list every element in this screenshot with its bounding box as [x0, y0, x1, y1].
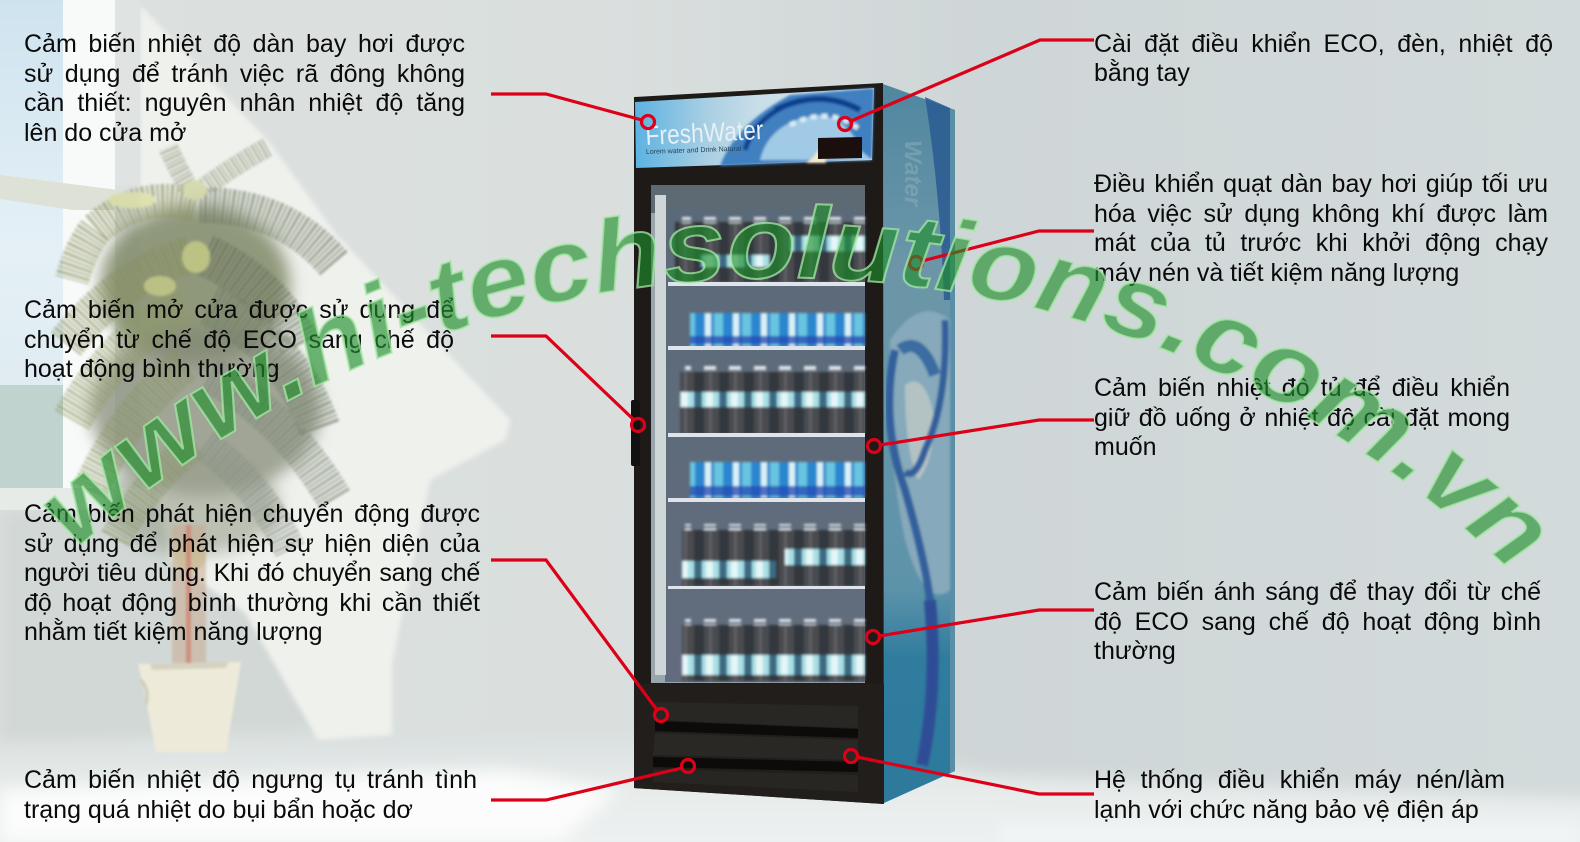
text: motion sensor: nhằm tiết kiệm năng lượng — [24, 618, 323, 646]
leader: evaporator sensor — [491, 94, 654, 128]
text: evaporator sensor: lên do cửa mở — [24, 119, 186, 147]
text: motion sensor: sử dụng để phát hiện sự hiện diện của — [24, 530, 480, 558]
leader: condenser sensor — [491, 760, 694, 800]
text: cabinet temperature sensor — [1094, 374, 1510, 461]
text: fan control — [1094, 170, 1548, 287]
text: fan control: máy nén và tiết kiệm năng lượng — [1094, 259, 1459, 287]
row 3 bottles — [680, 366, 865, 434]
text: door sensor — [24, 296, 454, 383]
text: condenser sensor: trạng quá nhiệt do bụi bẩn hoặc dơ — [24, 796, 413, 824]
text: cabinet temperature sensor: muốn — [1094, 433, 1157, 461]
row 1 bottles — [675, 217, 865, 282]
pot — [138, 662, 241, 752]
text: evaporator sensor: sử dụng để tránh việc rã đông không — [24, 60, 465, 88]
text: cabinet temperature sensor: Cảm biến nhiệt độ tủ để điều khiển — [1094, 374, 1510, 402]
header display panel — [635, 88, 874, 168]
text: door sensor: chuyển từ chế độ ECO sang chế độ — [24, 326, 454, 354]
text: light sensor: Cảm biến ánh sáng để thay đổi từ chế — [1094, 578, 1541, 606]
text: compressor protection — [1094, 766, 1505, 824]
text: light sensor — [1094, 578, 1541, 665]
text: fan control: hóa việc sử dụng không khí được làm — [1094, 200, 1548, 228]
condenser grille — [634, 684, 884, 804]
window — [0, 0, 150, 510]
side panel wave graphic — [889, 311, 950, 765]
glass door interior with shelves — [651, 185, 865, 683]
text: motion sensor: người tiêu dùng. Khi đó chuyển sang chế — [24, 559, 480, 587]
text: condenser sensor: Cảm biến nhiệt độ ngưng tụ tránh tình — [24, 766, 477, 794]
text: motion sensor — [24, 500, 480, 646]
side panel brand text: Water — [899, 140, 926, 208]
row 4 packs — [690, 462, 865, 498]
beverage rows — [675, 217, 865, 681]
text: door sensor: Cảm biến mở cửa được sử dụng để — [24, 296, 454, 324]
leader: door sensor — [491, 336, 644, 432]
leader: cabinet temperature sensor — [868, 420, 1094, 452]
text: condenser sensor — [24, 766, 477, 824]
fronds — [65, 147, 335, 571]
header swirl — [720, 88, 874, 166]
leader: light sensor — [866, 610, 1094, 644]
text: light sensor: độ ECO sang chế độ hoạt động bình — [1094, 608, 1541, 636]
row 6 bottles — [682, 619, 865, 681]
text: fan control: mát của tủ trước khi khởi động chạy — [1094, 229, 1548, 257]
sunlight on wall and floor — [140, 5, 510, 740]
text: evaporator sensor: cần thiết: nguyên nhân nhiệt độ tăng — [24, 89, 465, 117]
trunk — [172, 525, 206, 665]
shelves — [668, 282, 865, 589]
foliage mass — [90, 205, 320, 555]
row 5 bottles — [682, 524, 865, 586]
text: fan control: Điều khiển quạt dàn bay hơi giúp tối ưu — [1094, 170, 1548, 198]
text: motion sensor: Cảm biến phát hiện chuyển động được — [24, 500, 480, 528]
text: evaporator sensor: Cảm biến nhiệt độ dàn bay hơi được — [24, 30, 465, 58]
text: compressor protection: lạnh với chức năng bảo vệ điện áp — [1094, 796, 1479, 824]
cabinet front frame — [634, 83, 884, 804]
text: manual controls: bằng tay — [1094, 59, 1190, 87]
control display — [818, 137, 862, 159]
leader: manual controls — [838, 40, 1094, 130]
text: cabinet temperature sensor: giữ đồ uống ở nhiệt độ cài đặt mong — [1094, 404, 1510, 432]
door handle — [631, 400, 640, 466]
row 2 packs — [690, 313, 865, 347]
leader: compressor protection — [844, 750, 1094, 794]
text: compressor protection: Hệ thống điều khiển máy nén/làm — [1094, 766, 1505, 794]
text: manual controls — [1094, 30, 1553, 87]
brand name: FreshWater — [645, 115, 764, 151]
text: manual controls: Cài đặt điều khiển ECO, đèn, nhiệt độ — [1094, 30, 1553, 58]
side panel — [883, 84, 955, 803]
text: door sensor: hoạt động bình thường — [24, 355, 280, 383]
shaded wall behind pot — [0, 510, 330, 745]
brand tagline: Lorem water and Drink Natural — [646, 146, 742, 156]
leader: fan control — [910, 231, 1094, 270]
floor — [0, 726, 1580, 842]
text: motion sensor: độ hoạt động bình thường khi cần thiết — [24, 589, 480, 617]
leader: motion sensor — [491, 560, 668, 722]
text: evaporator sensor — [24, 30, 465, 147]
text: light sensor: thường — [1094, 637, 1176, 665]
watermark: www.hi-techsolutions.com.vn — [42, 203, 1542, 566]
palm plant — [65, 147, 335, 752]
